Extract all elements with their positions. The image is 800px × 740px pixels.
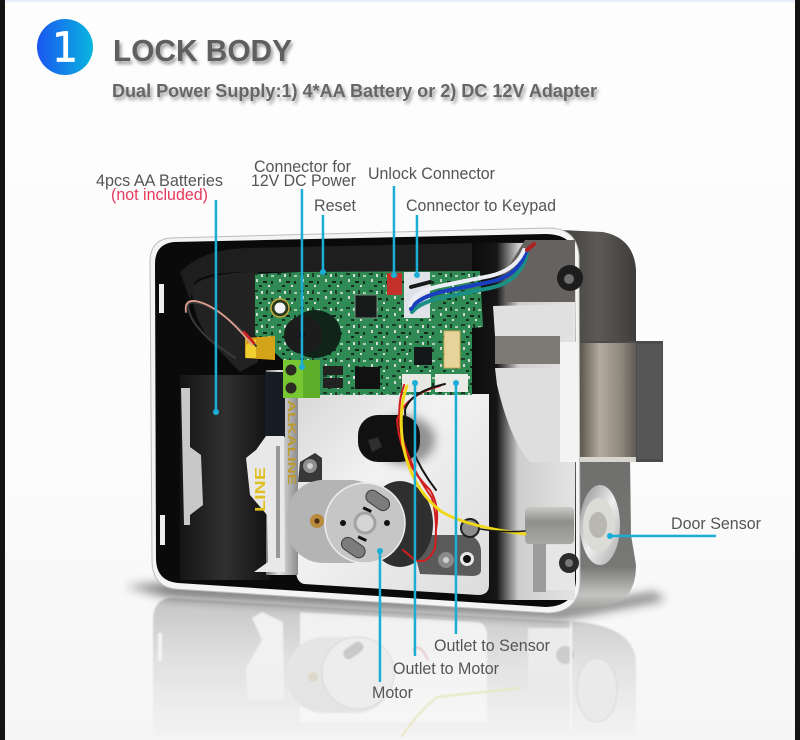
reflected right block — [528, 622, 617, 732]
pin connector — [444, 331, 460, 368]
motor and sensor wires — [397, 384, 525, 561]
label: door sensor: Door Sensor — [671, 514, 761, 533]
callout: keypad connector — [414, 215, 420, 278]
callout: DC power connector — [299, 189, 305, 370]
left recess — [192, 272, 258, 372]
sensor outlet connector — [435, 374, 468, 392]
title: LOCK BODY — [113, 33, 292, 68]
lock body photo — [150, 228, 663, 614]
AA battery holder — [180, 375, 270, 580]
terminal block — [283, 360, 320, 398]
sensor cylinder — [525, 507, 579, 592]
motor face — [325, 483, 405, 563]
motor outlet connector — [402, 374, 431, 392]
reflected slot — [158, 633, 162, 661]
callout: outlet to sensor — [453, 380, 459, 634]
label: DC power: Connector for — [254, 157, 351, 176]
label: batteries — [96, 171, 223, 204]
callout: door sensor — [607, 533, 716, 539]
main chip — [355, 295, 377, 318]
lower tab with screws — [410, 519, 481, 576]
keyhole — [358, 415, 435, 464]
label: outlet to sensor: Outlet to Sensor — [434, 636, 550, 655]
label: batteries: 4pcs AA Batteries — [96, 171, 223, 190]
motor housing — [287, 480, 387, 563]
reflected plate — [300, 612, 487, 722]
cable tube — [180, 242, 525, 300]
label: DC power — [251, 157, 356, 190]
AA batteries — [246, 370, 298, 575]
keypad wires — [410, 244, 534, 312]
right inner housing — [472, 240, 583, 600]
right dark edge — [795, 0, 800, 740]
latch bolt — [578, 341, 663, 462]
AA batteries: LINE — [252, 467, 269, 512]
motor gearbox — [367, 481, 433, 567]
yellow battery connector — [245, 336, 275, 360]
diodes — [323, 366, 343, 388]
callout: motor — [377, 548, 383, 682]
mosfet — [355, 367, 380, 389]
label: batteries: (not included) — [111, 185, 208, 204]
frame interior — [155, 234, 576, 607]
motor gold screw — [310, 514, 324, 528]
AA batteries: ALKALINE — [285, 400, 297, 485]
label: keypad connector: Connector to Keypad — [406, 196, 556, 215]
left dark edge — [0, 0, 5, 740]
reflected motor — [287, 637, 394, 713]
callout: batteries — [213, 200, 219, 415]
reflected battery label — [246, 612, 284, 700]
ground shadow — [125, 582, 665, 620]
front frame — [150, 228, 580, 613]
silver mounting plate — [296, 394, 489, 595]
rear housing upper — [540, 229, 636, 350]
label: reset: Reset — [314, 196, 356, 215]
label: DC power: 12V DC Power — [251, 171, 356, 190]
top edge strip — [5, 0, 795, 2]
rear housing lower — [540, 455, 636, 614]
callout: unlock connector — [391, 186, 397, 278]
mounting screw — [298, 453, 322, 482]
capacitor — [271, 299, 289, 317]
label: motor: Motor — [372, 683, 413, 702]
red unlock connector — [387, 273, 402, 295]
frame slots — [159, 284, 165, 545]
label: outlet to motor: Outlet to Motor — [393, 659, 499, 678]
reflected wires — [402, 648, 520, 736]
door sensor ring — [580, 485, 620, 565]
reflection of lock — [153, 598, 636, 738]
keypad connector — [404, 272, 430, 318]
number badge — [37, 19, 93, 75]
subtitle: Dual Power Supply:1) 4*AA Battery or 2) DC 12V Adapter — [112, 81, 597, 101]
eight pin chip — [414, 347, 432, 365]
circuit board — [255, 271, 483, 395]
buzzer — [284, 310, 341, 358]
number badge: 1 — [52, 24, 78, 72]
callout: reset — [320, 215, 326, 275]
label: unlock connector: Unlock Connector — [368, 164, 495, 183]
callout: outlet to motor — [412, 380, 418, 656]
battery wires — [186, 301, 256, 358]
reflected frame — [153, 598, 636, 738]
